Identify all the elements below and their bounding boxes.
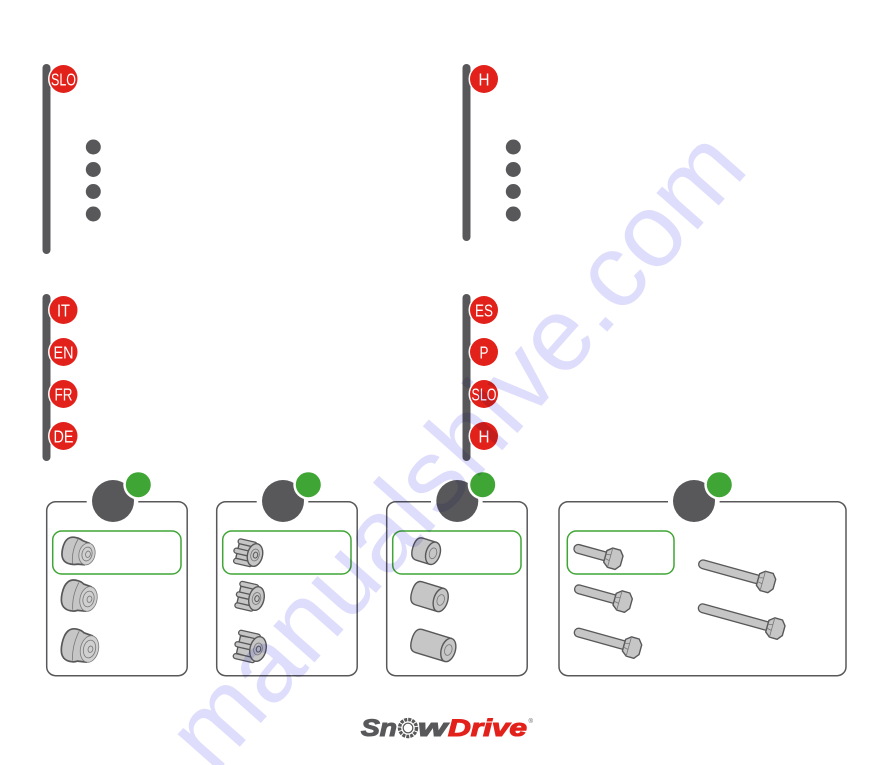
- icon: bolt size 3: [576, 623, 643, 659]
- selected size outline: [53, 531, 181, 574]
- selected size outline: [393, 531, 521, 574]
- badge: ES: ES: [475, 300, 493, 320]
- number badges: [673, 470, 734, 522]
- section: language list, right: [462, 294, 500, 461]
- icon: small bush: [60, 535, 98, 569]
- logo: SnowDrive: Drive: [448, 715, 527, 742]
- panel: ribbed bushes: [217, 470, 357, 676]
- badge: ES: [468, 294, 500, 326]
- badge: SLO: [48, 64, 79, 94]
- badge: H: [468, 420, 500, 452]
- badge: DE: [48, 420, 79, 452]
- badge: EN: EN: [54, 342, 74, 362]
- badge: IT: [48, 294, 79, 326]
- bullet dots: [86, 140, 101, 222]
- badge: SLO: SLO: [472, 384, 496, 404]
- badge: EN: [48, 336, 79, 368]
- bullet dots: [506, 140, 521, 222]
- icon: medium spacer: [409, 580, 451, 614]
- logo: SnowDrive: [361, 715, 534, 742]
- icon: long spacer: [408, 627, 459, 664]
- panel: spacers: [387, 470, 527, 676]
- logo: SnowDrive: Sn: [361, 715, 397, 742]
- icon: bolt size 4: [700, 555, 777, 594]
- logo: SnowDrive: w: [418, 715, 449, 742]
- badge: SLO: [468, 378, 500, 410]
- selected size outline: [567, 531, 674, 574]
- icon: large ribbed bush: [235, 632, 269, 663]
- icon: large bush: [59, 627, 102, 667]
- icon: small ribbed bush: [234, 540, 265, 568]
- badge: H: H: [478, 426, 490, 446]
- badge: H: H: [478, 69, 490, 89]
- icon: short spacer: [410, 536, 443, 566]
- icon: medium ribbed bush: [236, 583, 267, 612]
- number badges: [262, 470, 323, 522]
- badge: IT: IT: [57, 300, 70, 320]
- icon: bolt size 5: [700, 599, 786, 640]
- section: SLO instructions, top left: [42, 64, 101, 254]
- section: H instructions, top right: [462, 64, 521, 241]
- selected size outline: [223, 531, 351, 574]
- icon: medium bush: [59, 578, 100, 616]
- icon: tyre o: [400, 720, 416, 736]
- icon: bolt size 1: [576, 539, 624, 571]
- number badges: [92, 470, 153, 522]
- badge: FR: [48, 378, 79, 410]
- panel: rubber bushes: [47, 470, 187, 676]
- badge: P: P: [480, 342, 488, 362]
- icon: bolt size 2: [576, 580, 634, 613]
- badge: DE: DE: [54, 426, 74, 446]
- badge: P: [468, 336, 500, 368]
- badge: SLO: SLO: [51, 69, 76, 89]
- number badges: [436, 470, 498, 522]
- section: language list, left: [42, 294, 79, 461]
- logo: SnowDrive: ®: [528, 718, 534, 725]
- panel: bolts: [559, 470, 846, 676]
- badge: H: [468, 64, 500, 94]
- badge: FR: FR: [54, 384, 72, 404]
